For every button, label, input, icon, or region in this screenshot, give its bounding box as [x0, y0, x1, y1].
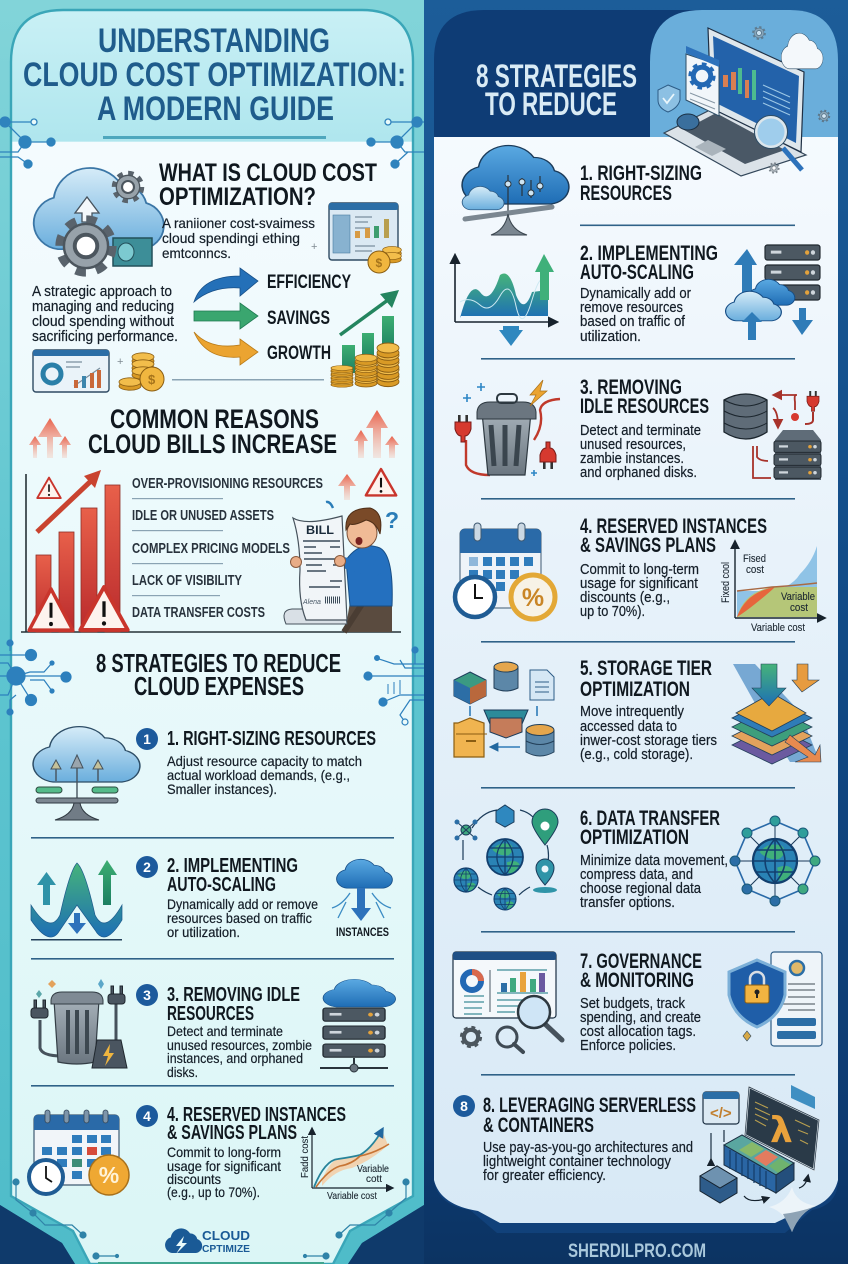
text: strategy 2: utilization. — [580, 329, 641, 345]
text: strategy 4: usage for significant — [580, 576, 698, 592]
right side background — [424, 0, 848, 1264]
text: garbled intro — [162, 215, 315, 261]
list: reasons — [132, 476, 323, 621]
text: strategy 3 — [580, 376, 709, 481]
icon: scaling servers and clouds — [726, 245, 820, 340]
badge 1: 1 — [143, 731, 151, 747]
logo: cloud optimize — [165, 1228, 250, 1255]
text: strategy 3: disks. — [167, 1064, 198, 1080]
left side teal background — [0, 0, 424, 1264]
icon: person with bill: BILL — [306, 523, 334, 537]
text: strategy 3: 3. REMOVING — [580, 376, 682, 399]
badge 8: 8 — [460, 1098, 468, 1114]
icon: serverless console and containers: λ — [770, 1110, 793, 1151]
icon: cloud and balance — [33, 727, 140, 820]
text: strategy 1: 1. RIGHT-SIZING — [580, 162, 702, 185]
labels: benefits — [267, 272, 351, 364]
text: strategy 3: RESOURCES — [167, 1003, 254, 1025]
text: strategy 3: 3. REMOVING IDLE — [167, 984, 300, 1006]
text: strategy 5: Move intrequently — [580, 704, 685, 720]
heading: 8 strategies left: 8 STRATEGIES TO REDUCE — [96, 648, 341, 678]
icon: dashboard with coins — [311, 203, 401, 273]
text: strategy 3: unused resources, — [580, 437, 686, 453]
heading: common reasons — [88, 404, 337, 459]
text: strategy 6: OPTIMIZATION — [580, 826, 689, 849]
strategy 2 left — [31, 855, 392, 940]
title: CLOUD COST OPTIMIZATION: — [23, 56, 406, 94]
text: strategy 5 — [580, 657, 717, 763]
strategy 3 right — [455, 376, 821, 481]
icon: autoscaling wave — [31, 860, 122, 940]
panel: left guide — [0, 10, 424, 1264]
chart: fixed vs variable cost area: Fixed cool — [720, 562, 732, 603]
text: strategy 4: & SAVINGS PLANS — [580, 534, 716, 557]
icon: storage objects — [454, 662, 554, 757]
icon: cloud instances: INSTANCES — [336, 925, 389, 939]
icon: dashboard with coins: $ — [376, 256, 382, 270]
text: strategy 2: based on traffic of — [580, 314, 686, 330]
text: strategy 5: 5. STORAGE TIER — [580, 657, 712, 680]
icon: calendar with clock and coin: % — [522, 584, 544, 612]
strategy 2 right — [455, 242, 820, 346]
text: strategy 4: discounts (e.g., — [580, 590, 670, 606]
text: strategy 8: 8. LEVERAGING SERVERLESS — [483, 1094, 696, 1117]
text: definition: cloud spending without — [32, 314, 174, 330]
icon: serverless console and containers: </> — [710, 1105, 732, 1122]
icon: bottom dashboard with coins: + — [117, 356, 123, 368]
circuit decoration top left — [0, 117, 55, 168]
list: reasons: IDLE OR UNUSED ASSETS — [132, 508, 274, 524]
icon: cloud with sliders and balance — [462, 146, 569, 235]
text: strategy 5: OPTIMIZATION — [580, 678, 690, 701]
text: strategy 7: 7. GOVERNANCE — [580, 950, 702, 973]
text: strategy 4: & SAVINGS PLANS — [167, 1122, 297, 1144]
circuit decoration top right — [367, 117, 424, 168]
badge 2 — [136, 856, 158, 878]
text: strategy 2: remove resources — [580, 300, 683, 316]
text: strategy 4 — [580, 515, 767, 620]
text: strategy 3: and orphaned disks. — [580, 465, 697, 481]
chart: fixed vs variable cost area: Variable — [781, 591, 815, 603]
icon: cloud server rack — [320, 979, 396, 1072]
chart: fixed vs variable cost area: Variable cost — [751, 622, 805, 634]
badge 3 — [136, 984, 158, 1006]
strategy 3 left — [31, 979, 396, 1080]
list: reasons: DATA TRANSFER COSTS — [132, 605, 265, 621]
icon: cloud instances — [332, 859, 392, 939]
text: strategy 8 — [483, 1094, 696, 1184]
icon: growth bars and coins — [331, 290, 399, 387]
text: strategy 6: transfer options. — [580, 895, 675, 911]
heading: what is cloud cost optimization: OPTIMIZATION? — [159, 183, 316, 211]
text: strategy 4: (e.g., up to 70%). — [167, 1184, 260, 1200]
heading: 8 strategies to reduce — [476, 58, 637, 122]
logo: cloud optimize: CLOUD — [202, 1228, 250, 1243]
circuit decoration bottom right — [304, 1179, 409, 1259]
icon: cloud with gears and money — [34, 168, 164, 272]
strategy 4 right — [455, 515, 824, 634]
text: strategy 7 — [580, 950, 702, 1054]
icon: storage tier layers and arrows — [732, 664, 821, 764]
arrow: growth — [194, 332, 258, 365]
text: strategy 1 — [580, 162, 702, 205]
icon: calendar, clock and percent coin — [29, 1110, 129, 1195]
heading: what is cloud cost optimization: WHAT IS CLOUD COST — [159, 159, 377, 187]
text: definition: sacrificing performance. — [32, 329, 178, 345]
text: strategy 6: compress data, and — [580, 867, 693, 883]
icon: monitoring dashboard — [453, 952, 562, 1052]
text: strategy 1: Adjust resource capacity to match — [167, 753, 362, 769]
text: strategy 6: choose regional data — [580, 881, 702, 897]
text: strategy 4: up to 70%). — [580, 604, 645, 620]
circuit decoration mid left — [0, 640, 71, 715]
icon: red up arrows left — [29, 418, 71, 458]
list: reasons: LACK OF VISIBILITY — [132, 573, 242, 589]
text: strategy 4 — [167, 1104, 346, 1200]
text: strategy 1: RESOURCES — [580, 182, 672, 205]
text: definition: A strategic approach to — [32, 284, 172, 300]
text: strategy 2: Dynamically add or remove — [167, 896, 318, 912]
strategy 5 right — [454, 657, 821, 764]
icon: bottom dashboard with coins: $ — [148, 372, 156, 387]
labels: benefits: GROWTH — [267, 343, 331, 364]
text: garbled intro: A raniioner cost-svaimess — [162, 215, 315, 231]
badge 1 — [136, 728, 158, 750]
chart: fixed vs variable cost area: Fised — [743, 553, 766, 565]
footer url: SHERDILPRO.COM — [568, 1241, 706, 1262]
heading: 8 strategies to reduce: 8 STRATEGIES — [476, 58, 637, 94]
badge 2: 2 — [143, 859, 151, 875]
heading: what is cloud cost optimization — [159, 159, 377, 211]
text: strategy 1: Smaller instances). — [167, 781, 277, 797]
icon: idle trash can and plugs — [31, 979, 127, 1068]
icon: global network — [730, 816, 820, 906]
text: strategy 4: Commit to long-term — [580, 562, 699, 578]
text: strategy 7: Enforce policies. — [580, 1038, 676, 1054]
arrow: efficiency — [194, 268, 258, 302]
text: strategy 6: 6. DATA TRANSFER — [580, 807, 720, 830]
text: strategy 4: discounts — [167, 1171, 221, 1187]
strategy 1 right — [462, 146, 702, 235]
text: strategy 5: accessed data to — [580, 719, 677, 735]
bar chart: rising costs — [21, 470, 401, 632]
text: strategy 5: (e.g., cold storage). — [580, 747, 693, 763]
strategy 7 right — [453, 950, 822, 1054]
icon: autoscaling area chart — [455, 254, 556, 346]
text: definition: managing and reducing — [32, 299, 174, 315]
icon: person with bill — [284, 502, 399, 632]
icon: laptop with magnifier — [658, 27, 829, 176]
text: strategy 2: resources based on traffic — [167, 910, 312, 926]
circuit decoration bottom left — [13, 1179, 118, 1259]
text: strategy 7: cost allocation tags. — [580, 1024, 696, 1040]
header band — [434, 10, 838, 137]
chart: fixed and variable cost: Fadd cost — [300, 1136, 311, 1178]
text: strategy 2: or utilization. — [167, 924, 240, 940]
text: strategy 7: spending, and create — [580, 1010, 701, 1026]
panel: right guide — [434, 10, 838, 1262]
text: strategy 2: 2. IMPLEMENTING — [580, 242, 718, 265]
text: strategy 1 — [167, 728, 376, 797]
heading: 8 strategies left — [96, 648, 341, 701]
icon: servers with connectors — [724, 391, 821, 480]
text: strategy 4: 4. RESERVED INSTANCES — [167, 1104, 346, 1126]
labels: benefits: SAVINGS — [267, 308, 330, 329]
text: strategy 1: 1. RIGHT-SIZING RESOURCES — [167, 728, 376, 750]
strategy 4 left — [29, 1104, 392, 1202]
badge 4 — [136, 1105, 158, 1127]
sparkle watermark — [769, 1187, 816, 1232]
title: UNDERSTANDING — [98, 22, 330, 60]
text: garbled intro: emtconncs. — [162, 245, 231, 261]
icon: security shield and policy document — [729, 952, 822, 1046]
title — [23, 22, 406, 139]
icon: calendar with clock and coin — [455, 523, 555, 619]
text: strategy 2: 2. IMPLEMENTING — [167, 855, 298, 877]
chart: fixed vs variable cost area — [720, 542, 824, 634]
text: strategy 3: unused resources, zombie — [167, 1037, 312, 1053]
text: strategy 8: & CONTAINERS — [483, 1114, 594, 1137]
text: strategy 3: zambie instances. — [580, 451, 684, 467]
chart: fixed and variable cost: cott — [366, 1174, 382, 1185]
icon: trash can with plugs — [455, 380, 560, 476]
list: reasons: COMPLEX PRICING MODELS — [132, 541, 290, 557]
strategy 1 left — [33, 727, 376, 820]
heading: common reasons: COMMON REASONS — [110, 404, 319, 434]
chart: fixed and variable cost: Variable cost — [327, 1191, 377, 1202]
text: strategy 3 — [167, 984, 312, 1080]
circuit decoration mid right — [364, 647, 424, 725]
text: strategy 2 — [580, 242, 718, 345]
strategy 6 right — [454, 805, 820, 911]
chart: fixed vs variable cost area: cost — [746, 564, 764, 576]
badge 8 — [453, 1095, 475, 1117]
text: strategy 5: inwer-cost storage tiers — [580, 733, 717, 749]
header image panel — [650, 10, 838, 137]
text: strategy 2: AUTO-SCALING — [167, 874, 276, 896]
text: strategy 3: Detect and terminate — [580, 423, 701, 439]
text: strategy 2: Dynamically add or — [580, 286, 691, 302]
strategy 8 right — [453, 1085, 819, 1203]
icon: person with bill: ? — [385, 507, 399, 533]
badge 3: 3 — [143, 987, 151, 1003]
icon: warning and arrow right — [338, 469, 396, 500]
chart: fixed and variable cost — [300, 1129, 392, 1202]
icon: data transfer network — [454, 805, 558, 910]
icon: red up arrows right — [354, 410, 399, 458]
icon: bottom dashboard with coins — [33, 350, 164, 392]
icon: calendar, clock and percent coin: % — [99, 1162, 119, 1188]
text: strategy 7: Set budgets, track — [580, 996, 686, 1012]
heading: 8 strategies to reduce: TO REDUCE — [485, 86, 617, 122]
text: strategy 4: 4. RESERVED INSTANCES — [580, 515, 767, 538]
text: strategy 2 — [167, 855, 318, 940]
text: strategy 1: actual workload demands, (e.g., — [167, 767, 350, 783]
text: definition — [32, 284, 178, 345]
badge 4: 4 — [143, 1108, 151, 1124]
text: strategy 6 — [580, 807, 728, 911]
arrow: savings — [194, 303, 258, 329]
text: strategy 6: Minimize data movement, — [580, 853, 728, 869]
heading: 8 strategies left: CLOUD EXPENSES — [134, 671, 304, 701]
icon: dashboard with coins: + — [311, 241, 317, 253]
chart: fixed and variable cost: Variable — [357, 1164, 389, 1175]
text: strategy 8: Use pay-as-you-go architectures and — [483, 1140, 693, 1156]
text: strategy 8: lightweight container technology — [483, 1154, 672, 1170]
text: strategy 3: Detect and terminate — [167, 1023, 283, 1039]
text: strategy 3: IDLE RESOURCES — [580, 395, 709, 418]
icon: person with bill: Alena — [302, 599, 321, 606]
text: strategy 7: & MONITORING — [580, 969, 694, 992]
chart: fixed vs variable cost area: cost — [790, 602, 808, 614]
heading: common reasons: CLOUD BILLS INCREASE — [88, 429, 337, 459]
text: garbled intro: cloud spendingi ething — [162, 230, 300, 246]
bottom-left navy corner — [0, 1205, 424, 1264]
title: A MODERN GUIDE — [97, 90, 334, 128]
labels: benefits: EFFICIENCY — [267, 272, 351, 293]
text: strategy 4: usage for significant — [167, 1158, 281, 1174]
text: strategy 4: Commit to long-form — [167, 1144, 281, 1160]
text: strategy 2: AUTO-SCALING — [580, 261, 694, 284]
text: strategy 8: for greater efficiency. — [483, 1168, 606, 1184]
icon: serverless console and containers — [700, 1085, 819, 1203]
logo: cloud optimize: CPTIMIZE — [202, 1244, 250, 1255]
text: strategy 3: instances, and orphaned — [167, 1050, 303, 1066]
list: reasons: OVER-PROVISIONING RESOURCES — [132, 476, 323, 492]
